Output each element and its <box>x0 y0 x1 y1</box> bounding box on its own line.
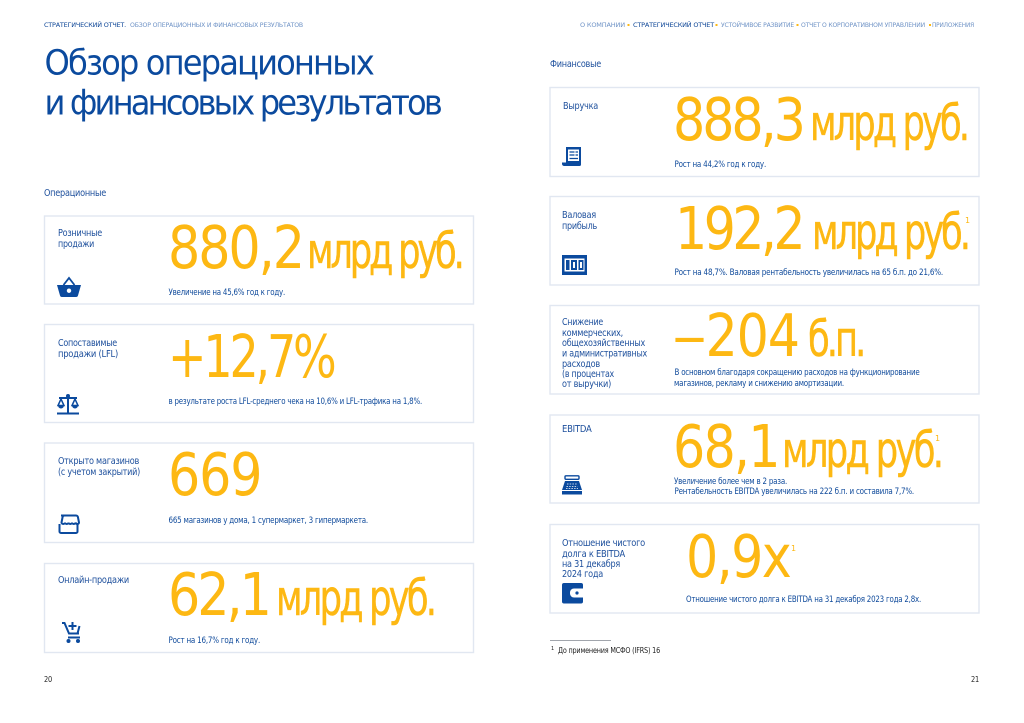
value: 62,1 billion rubles <box>168 560 437 629</box>
value: 62,1 billion rubles: 62,1 <box>168 560 272 629</box>
description: магазинов, рекламу и снижению амортизации. <box>674 379 844 389</box>
page number 21: 21 <box>971 675 979 684</box>
right page navigation header: ПРИЛОЖЕНИЯ <box>932 21 974 29</box>
label: net debt to EBITDA: на 31 декабря <box>562 559 620 570</box>
footnote: 1 <box>551 646 554 652</box>
right page navigation header: УСТОЙЧИВОЕ РАЗВИТИЕ <box>721 20 794 29</box>
left page running header <box>44 20 303 29</box>
heading: financial: Финансовые <box>550 59 601 70</box>
description: Рост на 44,2% год к году. <box>674 160 766 170</box>
label: LFL sales: Сопоставимые <box>58 338 117 349</box>
icon: store <box>60 516 79 533</box>
icon: cash register <box>562 476 582 494</box>
value: 192,2 billion rubles: 1 <box>965 216 970 225</box>
value: 192,2 billion rubles: 192,2 <box>675 194 806 263</box>
page number 20: 20 <box>44 675 52 684</box>
description: Рост на 16,7% год к году. <box>168 636 260 646</box>
footnote <box>550 640 660 655</box>
value: 62,1 billion rubles: млрд руб. <box>276 570 437 628</box>
value: 888,3 billion rubles: 888,3 <box>673 85 806 154</box>
value: minus 204 basis points: – <box>672 301 707 370</box>
label: stores opened: (с учетом закрытий) <box>58 467 140 478</box>
footnote: До применения МСФО (IFRS) 16 <box>558 646 660 655</box>
label: gross profit <box>562 210 598 232</box>
panel: stores opened <box>44 440 474 542</box>
value: 880,2 billion rubles: 880,2 <box>168 213 305 282</box>
right page navigation header: СТРАТЕГИЧЕСКИЙ ОТЧЕТ <box>633 20 714 29</box>
description: Увеличение на 45,6% год к году. <box>168 288 285 298</box>
value: 68,1 billion rubles <box>673 412 944 481</box>
description: Рентабельность EBITDA увеличилась на 222 б.п. и составила 7,7%. <box>674 487 914 497</box>
left page running header: ОБЗОР ОПЕРАЦИОННЫХ И ФИНАНСОВЫХ РЕЗУЛЬТАТОВ <box>130 21 303 29</box>
panel: retail sales <box>44 213 474 304</box>
title <box>44 42 443 123</box>
description: Увеличение более чем в 2 раза. <box>674 477 787 487</box>
value: 0,9x: 0,9x <box>686 522 792 591</box>
icon: wallet <box>562 583 583 604</box>
label: retail sales: продажи <box>58 239 94 250</box>
icon: cart <box>62 622 80 643</box>
value: 888,3 billion rubles: млрд руб. <box>810 95 970 153</box>
label: SG&A reduction: общехозяйственных <box>562 338 646 349</box>
value: 0,9x: 1 <box>791 544 796 553</box>
panel: net debt to EBITDA <box>550 522 979 613</box>
label: SG&A reduction: расходов <box>562 359 601 370</box>
icon: scales <box>57 394 79 414</box>
label: gross profit: прибыль <box>562 221 598 232</box>
label: net debt to EBITDA: долга к EBITDA <box>562 549 626 560</box>
label: net debt to EBITDA <box>562 538 645 580</box>
panel: EBITDA <box>550 412 979 503</box>
label: gross profit: Валовая <box>562 210 596 221</box>
value: minus 204 basis points <box>672 301 866 370</box>
label: EBITDA: EBITDA <box>562 424 592 435</box>
title: Обзор операционных <box>44 42 375 83</box>
label: stores opened: Открыто магазинов <box>58 456 140 467</box>
right page navigation header <box>580 20 974 29</box>
icon: basket <box>57 278 81 297</box>
value: 880,2 billion rubles <box>168 213 465 282</box>
right page navigation header: О КОМПАНИИ <box>580 21 625 29</box>
value: minus 204 basis points: б.п. <box>808 311 866 369</box>
label: LFL sales <box>58 338 118 360</box>
value: 669: 669 <box>168 440 263 509</box>
label: SG&A reduction: от выручки) <box>562 379 611 390</box>
left page running header: СТРАТЕГИЧЕСКИЙ ОТЧЕТ. <box>44 20 126 29</box>
value: 888,3 billion rubles <box>673 85 970 154</box>
label: stores opened <box>58 456 140 478</box>
description: в результате роста LFL-среднего чека на 10,6% и LFL-трафика на 1,8%. <box>168 397 422 407</box>
label: SG&A reduction <box>562 317 648 390</box>
label: SG&A reduction: и административных <box>562 348 648 360</box>
label: SG&A reduction: (в процентах <box>562 369 615 380</box>
description <box>674 368 920 389</box>
label: retail sales <box>58 228 102 250</box>
panel: online sales <box>44 560 474 652</box>
label: net debt to EBITDA: Отношение чистого <box>562 538 645 549</box>
value: 192,2 billion rubles: млрд руб. <box>812 204 971 262</box>
label: retail sales: Розничные <box>58 228 102 239</box>
panel: LFL sales <box>44 323 474 422</box>
description <box>674 477 914 497</box>
description: Отношение чистого долга к EBITDA на 31 декабря 2023 года 2,8х. <box>686 595 921 605</box>
icon: counter 100 <box>562 255 587 275</box>
label: SG&A reduction: Снижение <box>562 317 603 328</box>
value: 68,1 billion rubles: 1 <box>935 434 940 443</box>
label: SG&A reduction: коммерческих, <box>562 328 623 339</box>
description: В основном благодаря сокращению расходов на функционирование <box>674 368 920 378</box>
value: 68,1 billion rubles: 68,1 <box>673 412 781 481</box>
icon: receipt <box>562 147 581 166</box>
value: minus 204 basis points: 204 <box>706 301 800 370</box>
right page navigation header: ОТЧЕТ О КОРПОРАТИВНОМ УПРАВЛЕНИИ <box>801 21 925 29</box>
description: 665 магазинов у дома, 1 супермаркет, 3 гипермаркета. <box>168 516 368 526</box>
value: +12,7%: +12,7% <box>168 323 337 391</box>
label: net debt to EBITDA: 2024 года <box>562 569 603 580</box>
value: 68,1 billion rubles: млрд руб. <box>782 422 944 480</box>
heading: operational: Операционные <box>44 188 106 199</box>
panel: SG&A reduction <box>550 301 979 394</box>
label: LFL sales: продажи (LFL) <box>58 349 118 360</box>
value: 192,2 billion rubles <box>675 194 971 263</box>
panel: gross profit <box>550 194 979 285</box>
panel: revenue <box>550 85 979 176</box>
description: Рост на 48,7%. Валовая рентабельность увеличилась на 65 б.п. до 21,6%. <box>674 268 943 278</box>
label: online sales: Онлайн-продажи <box>58 575 129 586</box>
label: revenue: Выручка <box>563 101 598 112</box>
title: и финансовых результатов <box>44 82 443 123</box>
value: 880,2 billion rubles: млрд руб. <box>307 223 465 281</box>
